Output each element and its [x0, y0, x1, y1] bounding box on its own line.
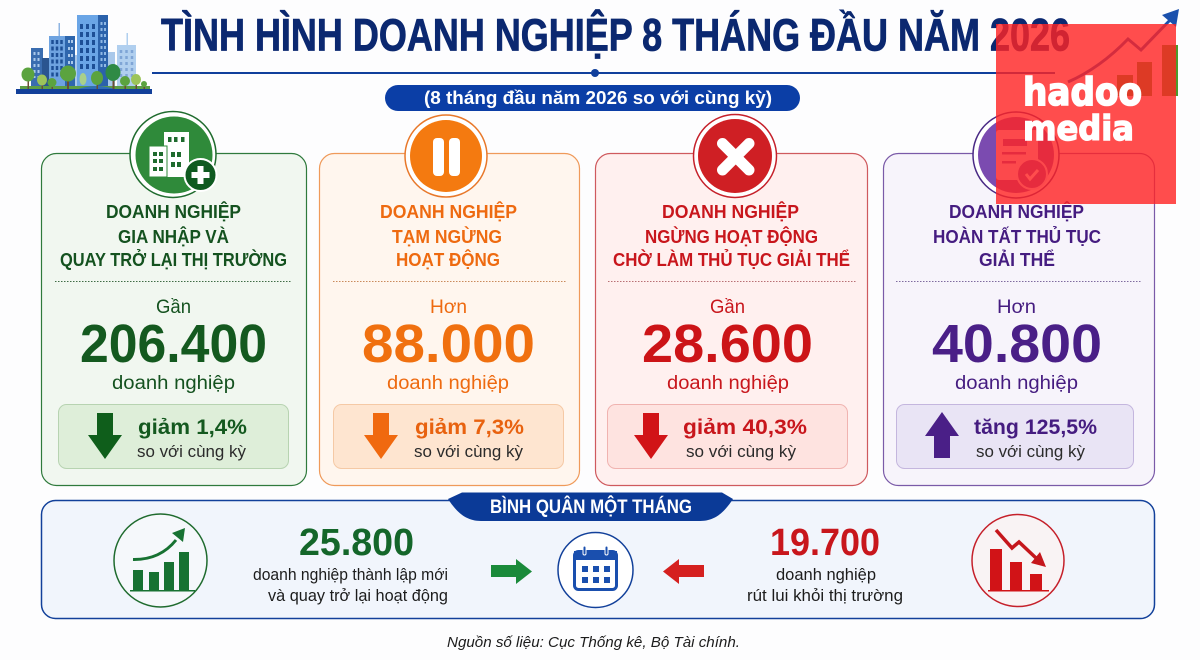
number: 206.400	[80, 314, 267, 374]
icon: cross	[694, 114, 776, 198]
panel: suspended businesses	[320, 115, 580, 486]
icon: rising bars	[114, 514, 207, 607]
arrow down	[364, 413, 398, 459]
panel: completed dissolution	[884, 112, 1154, 486]
unit: doanh nghiệp	[955, 373, 1078, 394]
qualifier: Hơn	[997, 297, 1036, 318]
heading: DOANH NGHIỆP	[662, 201, 799, 222]
card background	[596, 154, 868, 486]
subtitle pill: (8 tháng đầu năm 2026 so với cùng kỳ)	[424, 88, 772, 108]
change box: so với cùng kỳ	[414, 442, 523, 461]
heading: HOÀN TẤT THỦ TỤC	[933, 226, 1101, 247]
icon: city skyline	[16, 15, 152, 94]
arrow left	[663, 559, 704, 584]
description: exiting businesses: rút lui khỏi thị trường	[747, 587, 903, 605]
panel: new and returning businesses	[42, 112, 306, 486]
arrow down	[634, 413, 668, 459]
heading	[613, 201, 850, 270]
heading	[933, 201, 1101, 270]
description: new businesses: và quay trở lại hoạt động	[268, 587, 448, 605]
icon: document check	[973, 112, 1059, 198]
subtitle pill	[385, 85, 800, 111]
title underline	[152, 69, 1055, 77]
heading: DOANH NGHIỆP	[949, 201, 1084, 222]
icon: building plus	[130, 112, 216, 198]
arrow up	[925, 412, 959, 458]
card background	[884, 154, 1154, 486]
change box: giảm 7,3%	[415, 416, 524, 439]
description: exiting businesses: doanh nghiệp	[776, 566, 876, 584]
change box	[58, 404, 288, 468]
change box	[896, 404, 1134, 468]
heading: DOANH NGHIỆP	[106, 201, 241, 222]
number: new businesses: 25.800	[299, 522, 414, 564]
heading: TẠM NGỪNG	[392, 226, 502, 247]
watermark: hadoo media	[996, 24, 1176, 204]
description: new businesses: doanh nghiệp thành lập mới	[253, 566, 448, 584]
unit: doanh nghiệp	[387, 373, 509, 394]
tab heading: BÌNH QUÂN MỘT THÁNG	[490, 496, 692, 518]
qualifier: Gần	[156, 297, 191, 318]
unit: doanh nghiệp	[667, 373, 789, 394]
number: 40.800	[932, 314, 1102, 374]
change box: giảm 40,3%	[683, 416, 807, 439]
qualifier: Gần	[710, 297, 745, 318]
heading: HOẠT ĐỘNG	[396, 249, 500, 270]
icon: falling bars	[972, 514, 1064, 606]
description: exiting businesses	[747, 566, 903, 605]
source note: Nguồn số liệu: Cục Thống kê, Bộ Tài chính.	[447, 635, 740, 651]
icon: rising chart top right	[1068, 9, 1179, 96]
change box: so với cùng kỳ	[686, 442, 796, 461]
watermark: hadoo media: hadoo	[1023, 70, 1142, 114]
icon: calendar	[558, 532, 633, 608]
panel background	[42, 500, 1154, 618]
panel: monthly average	[42, 492, 1154, 618]
change box: giảm 1,4%	[138, 416, 247, 439]
icon: pause	[405, 115, 487, 197]
change box	[608, 404, 848, 468]
heading: GIẢI THỂ	[979, 249, 1055, 270]
card background	[42, 154, 306, 486]
change box: so với cùng kỳ	[137, 442, 246, 461]
watermark: hadoo media: media	[1023, 109, 1134, 149]
change box: so với cùng kỳ	[976, 442, 1085, 461]
tab heading	[448, 492, 733, 521]
unit: doanh nghiệp	[112, 373, 235, 394]
number: exiting businesses: 19.700	[770, 522, 880, 564]
heading: GIA NHẬP VÀ	[118, 226, 229, 247]
heading: NGỪNG HOẠT ĐỘNG	[645, 226, 818, 247]
change box	[334, 404, 564, 468]
heading: DOANH NGHIỆP	[380, 201, 517, 222]
arrow down	[88, 413, 122, 459]
description: new businesses	[253, 566, 448, 605]
heading	[60, 201, 287, 270]
arrow right	[491, 559, 532, 584]
number: 28.600	[642, 314, 813, 374]
heading: QUAY TRỞ LẠI THỊ TRƯỜNG	[60, 249, 287, 270]
panel: businesses awaiting dissolution	[596, 114, 868, 486]
qualifier: Hơn	[430, 297, 467, 318]
heading	[380, 201, 517, 270]
number: 88.000	[362, 314, 535, 374]
card background	[320, 154, 580, 486]
change box: tăng 125,5%	[974, 416, 1097, 439]
heading: CHỜ LÀM THỦ TỤC GIẢI THỂ	[613, 249, 850, 270]
